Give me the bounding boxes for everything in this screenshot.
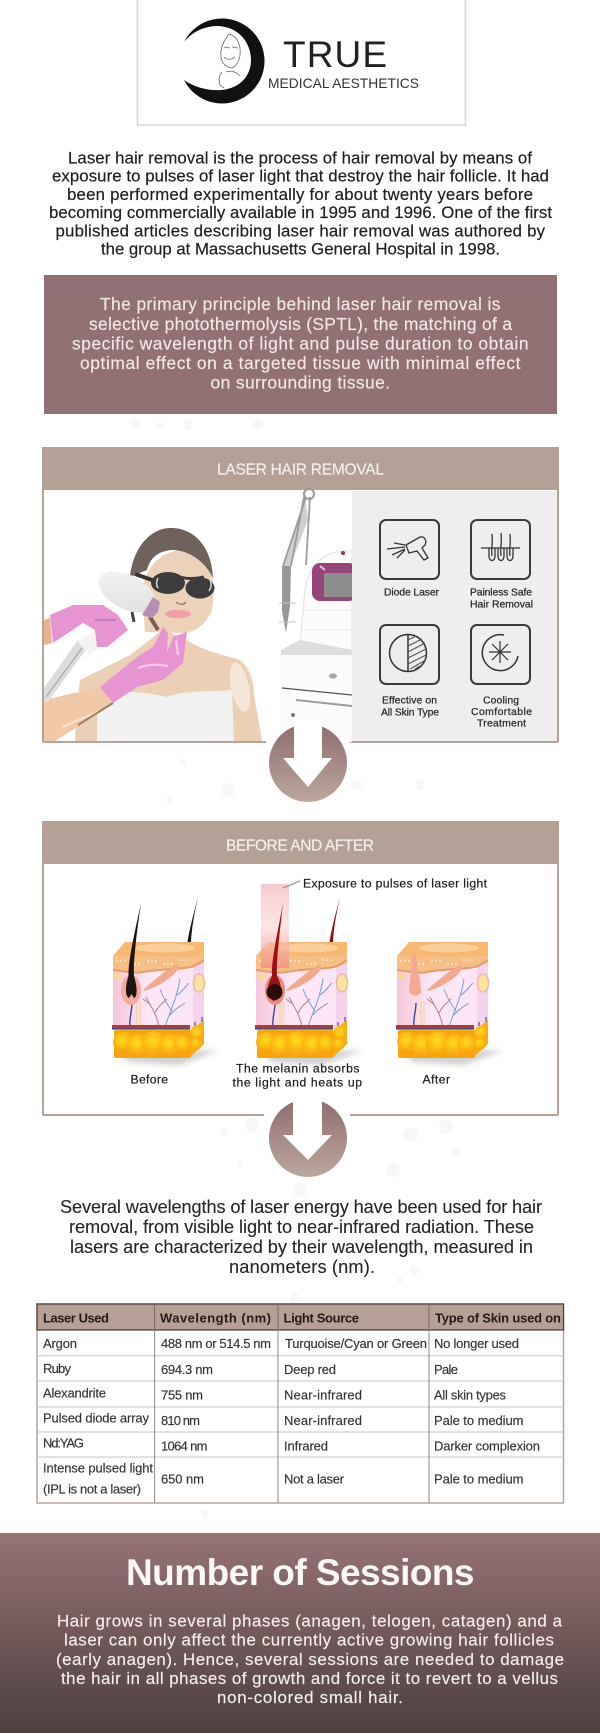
table row: Pulsed diode array — [43, 1410, 524, 1428]
illustration: laser machine — [279, 489, 357, 742]
intro text: the group at Massachusetts General Hospital in 1998. — [101, 240, 500, 258]
table row: Intense pulsed light: Intense pulsed light — [43, 1460, 153, 1476]
icon labels: Diode Laser — [384, 588, 440, 598]
table header row — [37, 1304, 564, 1330]
panel heading — [42, 447, 559, 490]
intro text: Laser hair removal is the process of hair removal by means of — [68, 148, 532, 168]
table row: Ruby: 694.3 nm — [161, 1362, 213, 1377]
wavelengths text: nanometers (nm). — [229, 1257, 375, 1277]
panel heading: LASER HAIR REMOVAL — [217, 462, 384, 478]
illustration: woman receiving treatment — [44, 528, 262, 741]
table row: Argon: Argon — [43, 1336, 77, 1351]
icon labels: Effective on — [382, 696, 437, 706]
panel: SPTL principle: The primary principle behind laser hair removal is — [100, 294, 501, 314]
left forearm stub — [44, 618, 52, 645]
table: laser types — [37, 1304, 564, 1503]
icon: hair follicles — [471, 520, 530, 579]
table row: Argon: Turquoise/Cyan or Green — [285, 1336, 427, 1351]
icon labels — [381, 588, 533, 730]
panel: SPTL principle: on surrounding tissue. — [210, 372, 390, 392]
body text: non-colored small hair. — [217, 1688, 403, 1707]
panel: feature icons — [352, 491, 557, 741]
table row: Alexandrite: Near-infrared — [284, 1388, 362, 1402]
logo card — [138, 0, 466, 125]
table row: Alexandrite — [43, 1386, 506, 1402]
table row: Argon — [43, 1336, 519, 1351]
body text: laser can only affect the currently active growing hair follicles — [64, 1631, 554, 1650]
panel: SPTL principle — [44, 275, 557, 414]
table row: Ruby: Deep red — [284, 1362, 336, 1377]
table row: Ruby — [43, 1361, 458, 1377]
skin diagram: before — [112, 897, 219, 1086]
body text: (early anagen). Hence, several sessions are needed to damage — [56, 1650, 564, 1669]
lower gloved hand — [100, 627, 187, 703]
table row: Nd:YAG: Darker complexion — [434, 1438, 540, 1454]
icon: half hatched circle — [380, 625, 439, 684]
table header row: Wavelength (nm) — [160, 1310, 271, 1326]
table row: Ruby: Pale — [434, 1362, 458, 1377]
table row: Alexandrite: 755 nm — [161, 1388, 203, 1402]
panel: before and after — [42, 821, 559, 1115]
panel: SPTL principle: optimal effect on a targeted tissue with minimal effect — [80, 353, 521, 373]
label: After — [422, 1072, 450, 1086]
callout: exposure label: Exposure to pulses of laser light — [303, 876, 488, 890]
table row: Pulsed diode array: 810 nm — [161, 1413, 200, 1428]
lower arm — [44, 687, 113, 741]
icon: crescent moon — [184, 18, 265, 104]
label: Before — [130, 1072, 168, 1086]
upper gloved hand — [50, 605, 128, 647]
table row: Intense pulsed light: 650 nm — [161, 1472, 204, 1486]
icon labels: Treatment — [477, 718, 526, 730]
icon: diode laser — [380, 520, 439, 579]
wavelengths text: lasers are characterized by their wavelength, measured in — [70, 1237, 533, 1257]
table header row: Laser Used — [43, 1310, 109, 1326]
table row: Intense pulsed light: Pale to medium — [434, 1472, 524, 1486]
icon labels: Hair Removal — [470, 600, 533, 610]
intro text: exposure to pulses of laser light that destroy the hair follicle. It had — [52, 166, 549, 186]
intro text: becoming commercially available in 1995 and 1996. One of the first — [49, 203, 552, 222]
arrow: down to wavelengths — [264, 1090, 350, 1177]
panel: laser hair removal — [0, 447, 600, 1733]
table row: Intense pulsed light: (IPL is not a laser) — [43, 1482, 141, 1496]
icon labels: Painless Safe — [470, 588, 532, 598]
intro text — [49, 148, 552, 258]
brand name: TRUE — [283, 34, 387, 75]
table row: Pulsed diode array: Near-infrared — [284, 1413, 362, 1428]
icon labels: Cooling — [483, 696, 519, 706]
skin diagram: after — [396, 942, 503, 1086]
wavelengths text — [60, 1197, 542, 1277]
table row: Argon: 488 nm or 514.5 nm — [161, 1336, 271, 1351]
icon labels: Comfortable — [471, 707, 532, 718]
table row: Alexandrite: All skin types — [434, 1388, 506, 1402]
table row: Nd:YAG: Nd:YAG — [43, 1436, 84, 1450]
table row: Nd:YAG — [43, 1436, 540, 1454]
table header row: Type of Skin used on — [435, 1310, 561, 1326]
table row: Pulsed diode array: Pulsed diode array — [43, 1410, 150, 1426]
arrow: down to before and after — [266, 720, 350, 802]
panel: SPTL principle: selective photothermolysis (SPTL), the matching of a — [89, 314, 512, 334]
table row: Nd:YAG: Infrared — [284, 1438, 328, 1454]
heading: Number of Sessions — [126, 1552, 474, 1593]
wavelengths text: removal, from visible light to near-infrared radiation. These — [69, 1217, 534, 1237]
device handle — [44, 640, 87, 702]
table row: Intense pulsed light — [43, 1460, 524, 1496]
icon labels: All Skin Type — [381, 708, 439, 718]
intro text: published articles describing laser hair removal was authored by — [56, 222, 546, 240]
icon: cooling snowflake — [471, 625, 530, 684]
device head — [92, 563, 162, 621]
panel: number of sessions — [0, 1533, 600, 1733]
panel: SPTL principle: specific wavelength of light and pulse duration to obtain — [72, 334, 528, 354]
icon: line-art face — [219, 34, 240, 88]
body text: the hair in all phases of growth and force it to revert to a vellus — [61, 1669, 558, 1688]
label: The melanin absorbs — [236, 1062, 360, 1076]
table row: Nd:YAG: 1064 nm — [161, 1438, 208, 1454]
laser beam — [261, 884, 289, 968]
label — [232, 1062, 362, 1090]
brand tagline: MEDICAL AESTHETICS — [268, 76, 419, 91]
skin diagram: melanin heating — [232, 876, 488, 1090]
table row: Ruby: Ruby — [43, 1361, 72, 1376]
wavelengths text: Several wavelengths of laser energy have been used for hair — [60, 1197, 542, 1217]
body text: Hair grows in several phases (anagen, telogen, catagen) and a — [57, 1612, 563, 1631]
table row: Intense pulsed light: Not a laser — [284, 1472, 345, 1486]
table row: Argon: No longer used — [434, 1336, 519, 1351]
table row: Pulsed diode array: Pale to medium — [434, 1413, 524, 1428]
table row: Alexandrite: Alexandrite — [43, 1386, 106, 1400]
panel heading — [42, 821, 559, 864]
table header row: Light Source — [284, 1310, 359, 1326]
intro text: been performed experimentally for about twenty years before — [67, 185, 533, 204]
label: the light and heats up — [232, 1076, 362, 1090]
panel heading: BEFORE AND AFTER — [226, 838, 374, 854]
body text — [56, 1612, 564, 1707]
